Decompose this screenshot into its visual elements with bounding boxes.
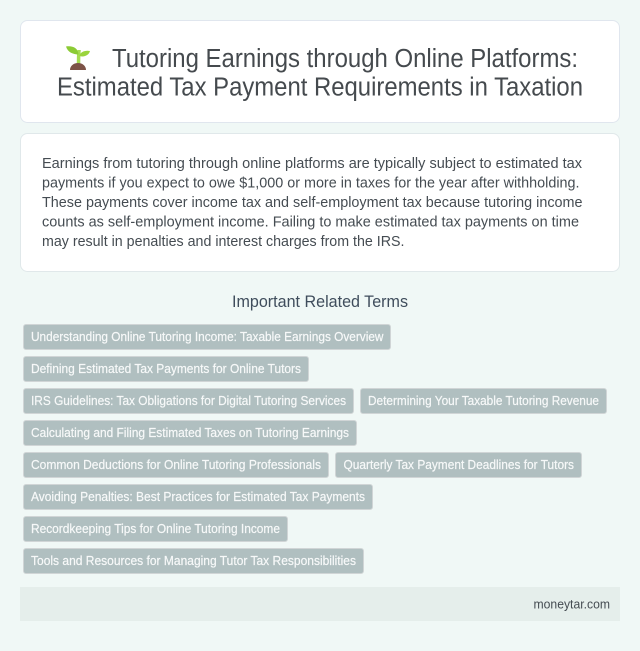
tag 8 bbox=[24, 484, 372, 510]
paragraph line 1: Earnings from tutoring through online platforms are typically subject to estimated tax bbox=[42, 155, 582, 172]
tag 4: Determining Your Taxable Tutoring Revenue bbox=[368, 393, 599, 408]
heading: related terms: Important Related Terms bbox=[232, 293, 408, 311]
tag 2: Defining Estimated Tax Payments for Online Tutors bbox=[31, 361, 301, 376]
tag 3: IRS Guidelines: Tax Obligations for Digital Tutoring Services bbox=[31, 393, 346, 408]
tag 6: Common Deductions for Online Tutoring Professionals bbox=[31, 457, 321, 472]
panel: summary paragraph bbox=[20, 134, 620, 272]
panel: title card bbox=[20, 20, 620, 122]
footer source text: moneytar.com bbox=[534, 596, 610, 612]
tag 5 bbox=[24, 420, 356, 446]
tag 5: Calculating and Filing Estimated Taxes on Tutoring Earnings bbox=[31, 425, 349, 440]
tag 7: Quarterly Tax Payment Deadlines for Tutors bbox=[344, 457, 574, 472]
paragraph line 3: These payments cover income tax and self-employment tax because tutoring income bbox=[42, 194, 582, 211]
panel: related term tags bbox=[24, 324, 606, 574]
tag 4 bbox=[360, 388, 606, 414]
paragraph line 2: payments if you expect to owe $1,000 or more in taxes for the year after withholding. bbox=[42, 174, 580, 192]
tag 1 bbox=[24, 324, 390, 350]
icon: seedling bbox=[66, 46, 90, 70]
tag 8: Avoiding Penalties: Best Practices for Estimated Tax Payments bbox=[31, 489, 365, 504]
footer bar bbox=[20, 587, 620, 621]
tag 10: Tools and Resources for Managing Tutor Tax Responsibilities bbox=[31, 553, 356, 568]
paragraph line 4: counts as self-employment income. Failing to make estimated tax payments on time bbox=[42, 214, 579, 230]
tag 9 bbox=[24, 516, 288, 542]
title line 1: Tutoring Earnings through Online Platforms: bbox=[112, 45, 578, 73]
tag 7 bbox=[336, 452, 582, 478]
title line 2: Estimated Tax Payment Requirements in Taxation bbox=[57, 74, 583, 102]
tag 6 bbox=[24, 452, 328, 478]
tag 2 bbox=[24, 356, 308, 382]
tag 10 bbox=[24, 548, 364, 574]
tag 1: Understanding Online Tutoring Income: Taxable Earnings Overview bbox=[31, 329, 384, 344]
tag 9: Recordkeeping Tips for Online Tutoring Income bbox=[31, 521, 280, 536]
tag 3 bbox=[24, 388, 354, 414]
paragraph line 5: may result in penalties and interest charges from the IRS. bbox=[42, 233, 404, 250]
